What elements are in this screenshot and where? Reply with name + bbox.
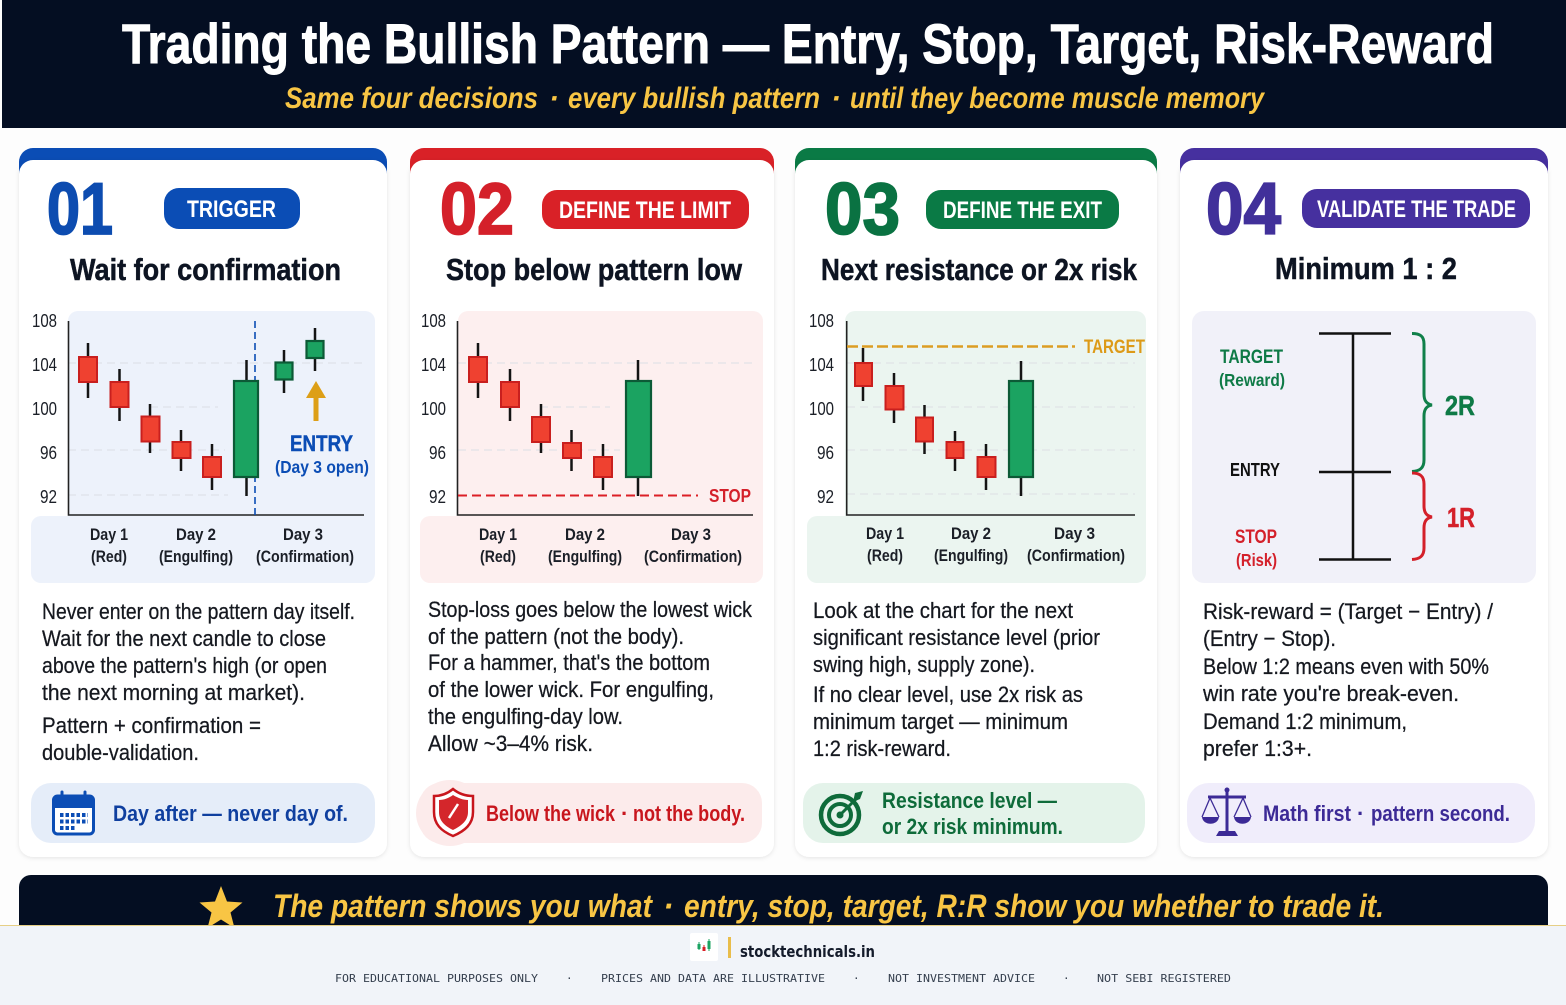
risk-reward diagram: STOP: [1235, 527, 1277, 548]
candlestick chart: target: (Confirmation): [1027, 546, 1125, 565]
pill: trigger: [164, 188, 300, 229]
footer: [0, 925, 1566, 1005]
callout: [803, 783, 1145, 843]
pill: define the limit: DEFINE THE LIMIT: [559, 197, 731, 224]
heading: Minimum 1 : 2: [1275, 251, 1457, 286]
pill: define the limit: [542, 190, 749, 229]
body text: Below 1:2 means even with 50%: [1203, 654, 1489, 679]
callout: [31, 783, 375, 843]
step number 01: 01: [47, 169, 113, 250]
candlestick chart: target: 100: [809, 398, 834, 419]
callout: Below the wick: [486, 801, 616, 826]
callout: Resistance level —: [882, 788, 1057, 813]
candlestick chart: stop: Day 3: [671, 525, 711, 544]
entry label: [275, 431, 369, 477]
candlestick chart: stop: [420, 310, 763, 583]
pill: define the exit: DEFINE THE EXIT: [943, 197, 1102, 224]
panel: 03 define the exit: [795, 148, 1157, 857]
brace: risk: [1412, 473, 1432, 560]
logo: [690, 933, 718, 961]
callout: [1187, 783, 1535, 843]
subtitle: every bullish pattern: [568, 82, 820, 115]
candlestick chart: entry: 100: [32, 398, 57, 419]
candlestick chart: entry: 108: [32, 310, 57, 331]
callout: Math first: [1263, 801, 1352, 826]
candlestick chart: target: 96: [817, 442, 834, 463]
candlestick chart: target: 104: [809, 354, 834, 375]
body text: [813, 598, 1100, 761]
candlestick chart: stop: (Confirmation): [644, 547, 742, 566]
candlestick chart: target: Day 3: [1054, 524, 1095, 543]
icon: calendar: [54, 792, 94, 834]
subtitle: Same four decisions: [285, 82, 538, 115]
body text: double-validation.: [42, 740, 199, 765]
icon: shield: [434, 789, 473, 836]
icon: scales: [1202, 788, 1251, 836]
risk-reward diagram: TARGET: [1220, 347, 1283, 368]
candlestick chart: stop: Day 1: [479, 525, 517, 544]
target label: TARGET: [1084, 337, 1145, 358]
disclaimer: ·: [1063, 972, 1070, 985]
disclaimer: FOR EDUCATIONAL PURPOSES ONLY: [335, 972, 538, 985]
body text: of the lower wick. For engulfing,: [428, 677, 714, 702]
body text: (Entry − Stop).: [1203, 626, 1336, 651]
candlestick chart: stop: 104: [421, 354, 446, 375]
candlestick chart: stop: (Red): [480, 547, 516, 566]
pill: validate the trade: [1302, 189, 1530, 228]
body text: [42, 599, 355, 765]
step number 02: 02: [440, 169, 514, 250]
candlestick chart: stop: 100: [421, 398, 446, 419]
body text: For a hammer, that's the bottom: [428, 650, 710, 675]
body text: minimum target — minimum: [813, 709, 1068, 734]
target line: [847, 345, 1075, 348]
disclaimer: NOT INVESTMENT ADVICE: [888, 972, 1035, 985]
candlestick chart: stop: 96: [429, 442, 446, 463]
entry label: ENTRY: [290, 431, 353, 456]
callout: ·: [621, 801, 628, 826]
arrow: entry: [306, 381, 326, 421]
icon: star: [200, 886, 242, 928]
candlestick chart: stop: (Engulfing): [548, 547, 622, 566]
disclaimer: ·: [853, 972, 860, 985]
candlestick chart: target: 108: [809, 310, 834, 331]
entry label: (Day 3 open): [275, 457, 369, 477]
banner text: [273, 888, 1384, 924]
body text: 1:2 risk-reward.: [813, 736, 951, 761]
risk-reward diagram: (Risk): [1236, 550, 1277, 570]
candlestick chart: target: [807, 310, 1146, 583]
risk-reward diagram: 1R: [1447, 502, 1475, 533]
disclaimer: ·: [566, 972, 573, 985]
body text: swing high, supply zone).: [813, 652, 1035, 677]
step number 04: 04: [1206, 169, 1281, 250]
candlestick chart: entry: 92: [40, 486, 57, 507]
body text: above the pattern's high (or open: [42, 653, 327, 678]
risk-reward diagram: 2R: [1445, 390, 1475, 421]
body text: the engulfing-day low.: [428, 704, 623, 729]
disclaimer: NOT SEBI REGISTERED: [1097, 972, 1231, 985]
candlestick chart: entry: Day 3: [283, 525, 323, 544]
callout: pattern second.: [1371, 801, 1510, 826]
header banner: [2, 0, 1566, 128]
heading: Next resistance or 2x risk: [821, 252, 1138, 287]
candlestick chart: stop: 108: [421, 310, 446, 331]
candlestick chart: target: Day 1: [866, 524, 904, 543]
risk-reward diagram: (Reward): [1219, 370, 1285, 390]
body text: prefer 1:3+.: [1203, 736, 1312, 761]
banner text: The pattern shows you what: [273, 888, 653, 924]
candlestick chart: target: (Engulfing): [934, 546, 1008, 565]
subtitle: ·: [549, 82, 559, 115]
stop line: [458, 494, 698, 496]
pill: define the exit: [926, 190, 1119, 229]
banner text: entry, stop, target, R:R show you whether to trade it.: [684, 888, 1384, 924]
stop label: STOP: [709, 486, 751, 506]
banner text: ·: [663, 888, 674, 924]
callout: [416, 780, 762, 846]
panel: 02 define the limit: [410, 148, 774, 857]
subtitle: until they become muscle memory: [850, 82, 1265, 115]
icon: target: [821, 791, 863, 834]
panel: 04 validate the trade: [1180, 148, 1548, 857]
body text: If no clear level, use 2x risk as: [813, 682, 1083, 707]
candlestick chart: entry: (Red): [91, 547, 127, 566]
subtitle: [285, 82, 1265, 115]
callout: not the body.: [633, 801, 745, 826]
panel: 01 trigger: [19, 148, 387, 857]
candlestick chart: entry: [31, 310, 375, 583]
body text: Allow ~3–4% risk.: [428, 731, 593, 756]
callout: Day after — never day of.: [113, 801, 348, 826]
bottom banner: [19, 875, 1548, 930]
subtitle: ·: [831, 82, 841, 115]
body text: Wait for the next candle to close: [42, 626, 326, 651]
body text: Demand 1:2 minimum,: [1203, 709, 1407, 734]
candlestick chart: entry: (Confirmation): [256, 547, 354, 566]
body text: [428, 597, 753, 756]
body text: win rate you're break-even.: [1202, 681, 1459, 706]
callout: ·: [1357, 801, 1364, 826]
body text: Never enter on the pattern day itself.: [42, 599, 355, 624]
body text: significant resistance level (prior: [813, 625, 1100, 650]
brace: reward: [1412, 334, 1432, 472]
heading: Wait for confirmation: [70, 252, 341, 287]
candlestick chart: target: Day 2: [951, 524, 991, 543]
disclaimer: [335, 972, 1231, 985]
body text: Look at the chart for the next: [813, 598, 1073, 623]
disclaimer: PRICES AND DATA ARE ILLUSTRATIVE: [601, 972, 825, 985]
step number 03: 03: [825, 169, 900, 250]
pill: trigger: TRIGGER: [187, 196, 276, 223]
body text: Risk-reward = (Target − Entry) /: [1203, 599, 1494, 624]
candlestick chart: entry: Day 2: [176, 525, 216, 544]
brand name: stocktechnicals.in: [740, 942, 875, 961]
body text: of the pattern (not the body).: [428, 624, 684, 649]
candlestick chart: target: 92: [817, 486, 834, 507]
candlestick chart: stop: 92: [429, 486, 446, 507]
body text: [1202, 599, 1494, 761]
body text: Pattern + confirmation =: [42, 713, 261, 738]
candlestick chart: entry: (Engulfing): [159, 547, 233, 566]
body text: the next morning at market).: [42, 680, 305, 705]
candlestick chart: target: (Red): [867, 546, 903, 565]
candlestick chart: entry: Day 1: [90, 525, 128, 544]
risk-reward diagram: [1192, 311, 1536, 583]
body text: Stop-loss goes below the lowest wick: [428, 597, 753, 622]
risk-reward diagram: ENTRY: [1230, 460, 1280, 480]
heading: Stop below pattern low: [446, 252, 743, 287]
candlestick chart: stop: Day 2: [565, 525, 605, 544]
candlestick chart: entry: 96: [40, 442, 57, 463]
callout: or 2x risk minimum.: [882, 814, 1063, 839]
candlestick chart: entry: 104: [32, 354, 57, 375]
